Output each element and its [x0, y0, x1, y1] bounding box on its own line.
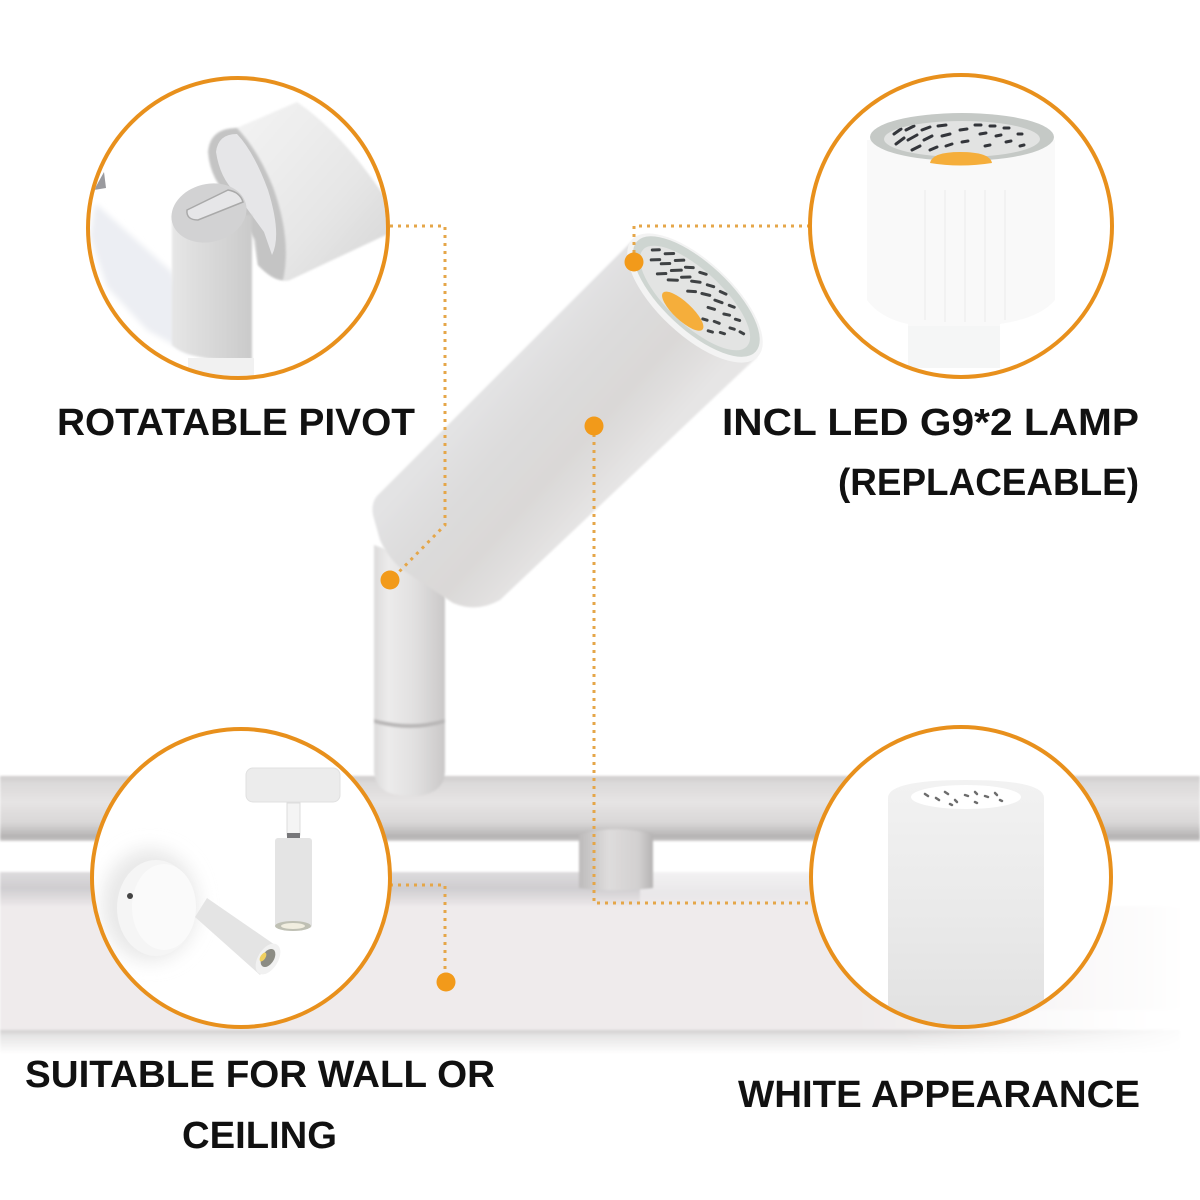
product: lamp arm: [374, 545, 445, 796]
ceiling fixture: [246, 768, 340, 931]
label: wall or ceiling: [25, 1054, 495, 1157]
LED chip: [930, 152, 992, 166]
circle outline: [810, 75, 1112, 377]
label: wall or ceiling: CEILING: [182, 1115, 337, 1157]
wall fixture: [117, 860, 285, 979]
leader line: rotatable pivot: [390, 226, 445, 580]
label: wall or ceiling: SUITABLE FOR WALL OR: [25, 1054, 495, 1096]
leader dot: pivot: [380, 570, 400, 590]
leader dot: white appearance: [584, 416, 604, 436]
label: LED lamp: INCL LED G9*2 LAMP: [722, 402, 1139, 444]
label: rotatable pivot: ROTATABLE PIVOT: [57, 402, 415, 444]
circle outline: [92, 729, 390, 1027]
panel: wall or ceiling mount: [92, 729, 390, 1027]
product: lamp head: [372, 212, 783, 607]
circle outline: [88, 78, 388, 378]
leader line: white appearance: [594, 426, 810, 903]
label: LED lamp: [722, 402, 1139, 504]
leader dot: LED lamp: [624, 252, 644, 272]
product: ceiling rail: [0, 776, 1200, 1070]
leader dot: wall or ceiling: [436, 972, 456, 992]
product: rail connector stub: [579, 829, 653, 890]
circle outline: [811, 727, 1111, 1027]
label: white appearance: WHITE APPEARANCE: [738, 1074, 1140, 1116]
leader line: wall or ceiling: [390, 885, 445, 982]
panel: white appearance: [811, 727, 1111, 1040]
leader line: LED lamp: [634, 226, 810, 262]
LED chip: [657, 286, 709, 336]
panel: LED lamp detail: [810, 75, 1112, 377]
panel: rotatable pivot detail: [88, 78, 390, 386]
label: LED lamp: (REPLACEABLE): [838, 462, 1139, 504]
